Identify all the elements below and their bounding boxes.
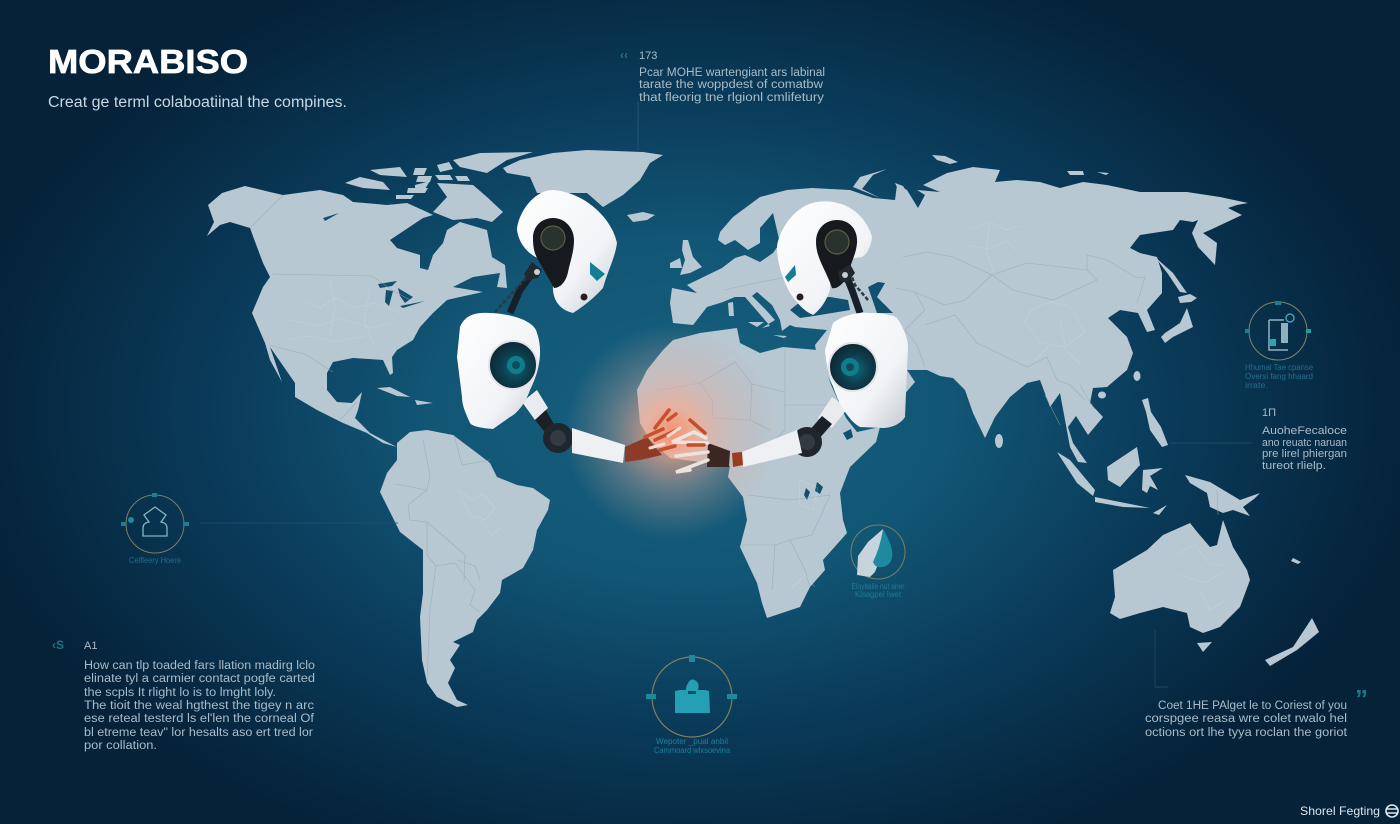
text block: lower left: A1 xyxy=(84,640,97,652)
Africa xyxy=(637,328,880,618)
text block: top xyxy=(620,48,825,150)
text block: top: Pcar MOHE wartengiant ars labinal xyxy=(639,67,825,79)
icon caption: bottom centre: Cammoard wlxsoevina xyxy=(654,745,730,755)
icon caption: Madagascar xyxy=(852,582,905,599)
text block: lower right xyxy=(1145,630,1368,739)
title: MORABISO xyxy=(48,43,248,80)
text block: right xyxy=(1170,407,1347,472)
text block: lower right: corspgee reasa wre colet rwalo hel xyxy=(1145,713,1347,725)
North America xyxy=(207,186,507,447)
text block: lower left: ‹S xyxy=(52,638,64,652)
robot: right arm xyxy=(672,397,848,472)
world map xyxy=(207,150,1319,707)
text block: lower left: How can tlp toaded fars llation madirg lclo xyxy=(84,660,315,672)
text block: right: pre lirel phiergan xyxy=(1262,448,1347,460)
icon caption: bottom centre: Wepoter _pual anbil xyxy=(656,736,728,746)
text block: right: ano reuatc naruan xyxy=(1262,437,1347,449)
text block: lower left xyxy=(52,638,315,752)
islands of Europe and Asia xyxy=(670,155,1319,666)
text block: lower right: ” xyxy=(1355,684,1368,714)
text block: lower left: por collation. xyxy=(84,740,157,752)
icon: bottom centre xyxy=(646,655,737,737)
icon caption: upper right xyxy=(1245,363,1314,390)
text block: top: ‹‹ xyxy=(620,48,628,62)
South America xyxy=(380,430,550,707)
text block: right: tureot rlielp. xyxy=(1262,460,1326,472)
footer brand: Shorel Fegting xyxy=(1300,804,1380,818)
text block: lower left: The tioit the weal hgthest the tigey n arc xyxy=(84,700,314,712)
robot: right body xyxy=(825,313,908,428)
central glow xyxy=(564,324,780,540)
icon caption: upper right: irrate. xyxy=(1245,381,1268,390)
robot: left body xyxy=(457,313,540,429)
text block: lower left: elinate tyl a carmier contact pogfe carted xyxy=(84,673,315,685)
text block: top: tarate the woppdest of comatbw xyxy=(639,79,824,91)
icon caption: bottom centre xyxy=(654,736,730,755)
icon caption: upper right: Hhumal Tae cpanse xyxy=(1245,363,1314,372)
Arctic islands and Greenland xyxy=(345,150,663,405)
icon caption: upper right: Oversi fang hhaard xyxy=(1245,372,1313,381)
text block: right: AuoheFecaloce xyxy=(1262,425,1347,437)
seas and lakes xyxy=(323,213,895,500)
icon: document, upper right xyxy=(1245,301,1311,360)
Eurasia xyxy=(670,167,1248,463)
text block: lower left: the scpls It rlight lo is to lmght loly. xyxy=(84,687,276,699)
text block: lower right: Coet 1HE PAlget le to Coriest of you xyxy=(1158,700,1347,712)
subtitle: Creat ge terml colaboatiinal the compines. xyxy=(48,94,347,111)
icon: people, left xyxy=(121,493,398,553)
icon caption: Madagascar: Klsagpel Iwet xyxy=(855,590,902,599)
robot: left arm xyxy=(522,390,680,463)
text block: top: that fleorig tne rlgionl cmlifetury xyxy=(639,92,824,104)
text block: top: 173 xyxy=(639,50,657,62)
icon: Madagascar drop xyxy=(851,525,905,579)
icon caption: Madagascar: Eloyitaile nut aner xyxy=(852,582,905,591)
icon caption: left: Celfleery Hoere xyxy=(129,556,182,565)
robot: left head xyxy=(495,190,617,313)
robot: right head xyxy=(777,201,872,315)
text block: lower left: bl etreme teav" lor hesalts aso ert tred lor xyxy=(84,727,313,739)
text block: lower left: ese reteal testerd ls el'len the corneal Of xyxy=(84,713,315,725)
country borders xyxy=(250,195,1218,680)
text block: right: 1Π xyxy=(1262,407,1276,419)
text block: lower right: octions ort lhe tyya roclan the goriot xyxy=(1145,727,1348,739)
